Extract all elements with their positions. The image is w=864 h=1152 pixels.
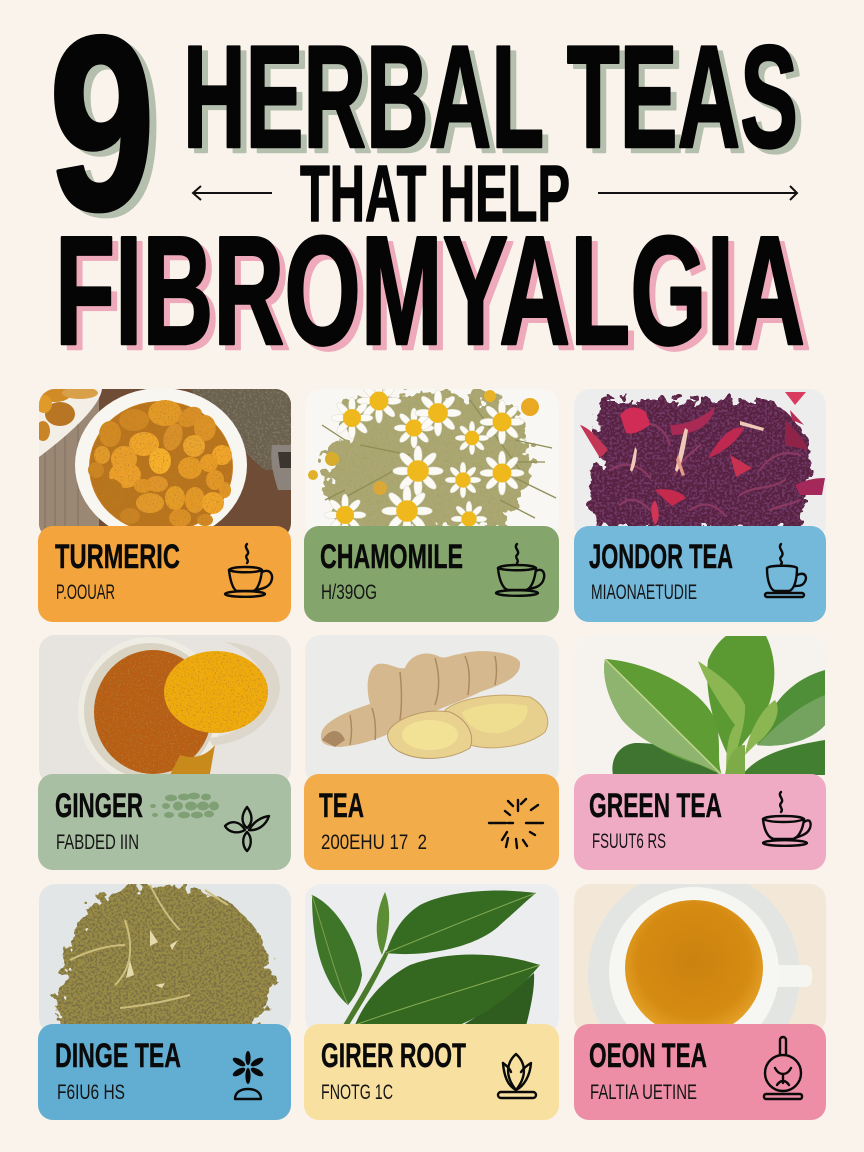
name: turmeric: TURMERIC (55, 538, 180, 576)
photo: dried loose herbs (39, 884, 291, 1040)
photo: turmeric chunks in bowl (36, 386, 291, 542)
photo: cup of tea from above (574, 884, 826, 1028)
arrow: right (598, 186, 797, 200)
panel: jondor tea (574, 389, 826, 622)
label: chamomile (304, 526, 559, 622)
icon: lotus on base (498, 1054, 536, 1098)
heading: that help: THAT HELP (300, 149, 570, 238)
subtitle: ginger: FABDED IIN (56, 831, 139, 854)
panel: girer root (304, 884, 559, 1120)
panel: tea (304, 635, 559, 870)
subtitle: green tea: FSUUT6 RS (592, 830, 666, 853)
photo: hibiscus loose tea (574, 389, 826, 539)
panel: green tea (574, 635, 826, 870)
icon: tea cup (496, 544, 544, 596)
label: oeon tea (574, 1024, 826, 1120)
label: turmeric (38, 526, 291, 622)
subtitle: jondor tea: MIAONAETUDIE (591, 581, 697, 604)
panel: dinge tea (38, 884, 291, 1120)
arrow: left (193, 186, 272, 200)
panel: oeon tea (574, 869, 826, 1120)
panel: ginger (38, 635, 291, 870)
panel: chamomile (304, 379, 559, 622)
name: dinge tea: DINGE TEA (55, 1037, 181, 1075)
icon: infuser (764, 1037, 802, 1099)
name: girer root: GIRER ROOT (321, 1037, 466, 1075)
label: girer root (304, 1024, 559, 1120)
subtitle: chamomile: H/39OG (321, 581, 377, 604)
label: tea (304, 774, 559, 870)
photo: ginger root (305, 635, 559, 785)
subtitle: turmeric: P.OOUAR (56, 581, 115, 604)
subtitle: tea: 200EHU 17 2 (321, 831, 427, 854)
label: ginger (38, 774, 291, 870)
icon: tea cup (765, 544, 806, 597)
name: tea: TEA (319, 787, 364, 825)
subtitle: girer root: FNOTG 1C (321, 1081, 393, 1104)
icon: tea cup (763, 792, 811, 846)
subtitle: dinge tea: F6IU6 HS (57, 1081, 125, 1104)
name: green tea: GREEN TEA (589, 787, 722, 825)
name: ginger: GINGER (55, 787, 143, 825)
photo: dark green leaves (305, 884, 559, 1034)
photo: green tea leaves (604, 636, 825, 775)
icon: flower on mound (231, 1051, 265, 1099)
icon: tea cup (225, 544, 272, 597)
name: chamomile: CHAMOMILE (320, 538, 463, 576)
icon: herb sprig (225, 807, 269, 851)
title (49, 0, 805, 377)
name: jondor tea: JONDOR TEA (589, 538, 733, 576)
photo: chamomile flowers (308, 389, 556, 526)
panel: turmeric (36, 386, 291, 622)
label: dinge tea (38, 1024, 291, 1120)
decorative leaf pattern (150, 793, 219, 818)
icon: burst (489, 799, 543, 848)
label: green tea (574, 774, 826, 870)
subtitle: oeon tea: FALTIA UETINE (590, 1081, 697, 1104)
photo: turmeric powder bowl (39, 635, 291, 785)
name: oeon tea: OEON TEA (589, 1037, 707, 1075)
label: jondor tea (574, 526, 826, 622)
